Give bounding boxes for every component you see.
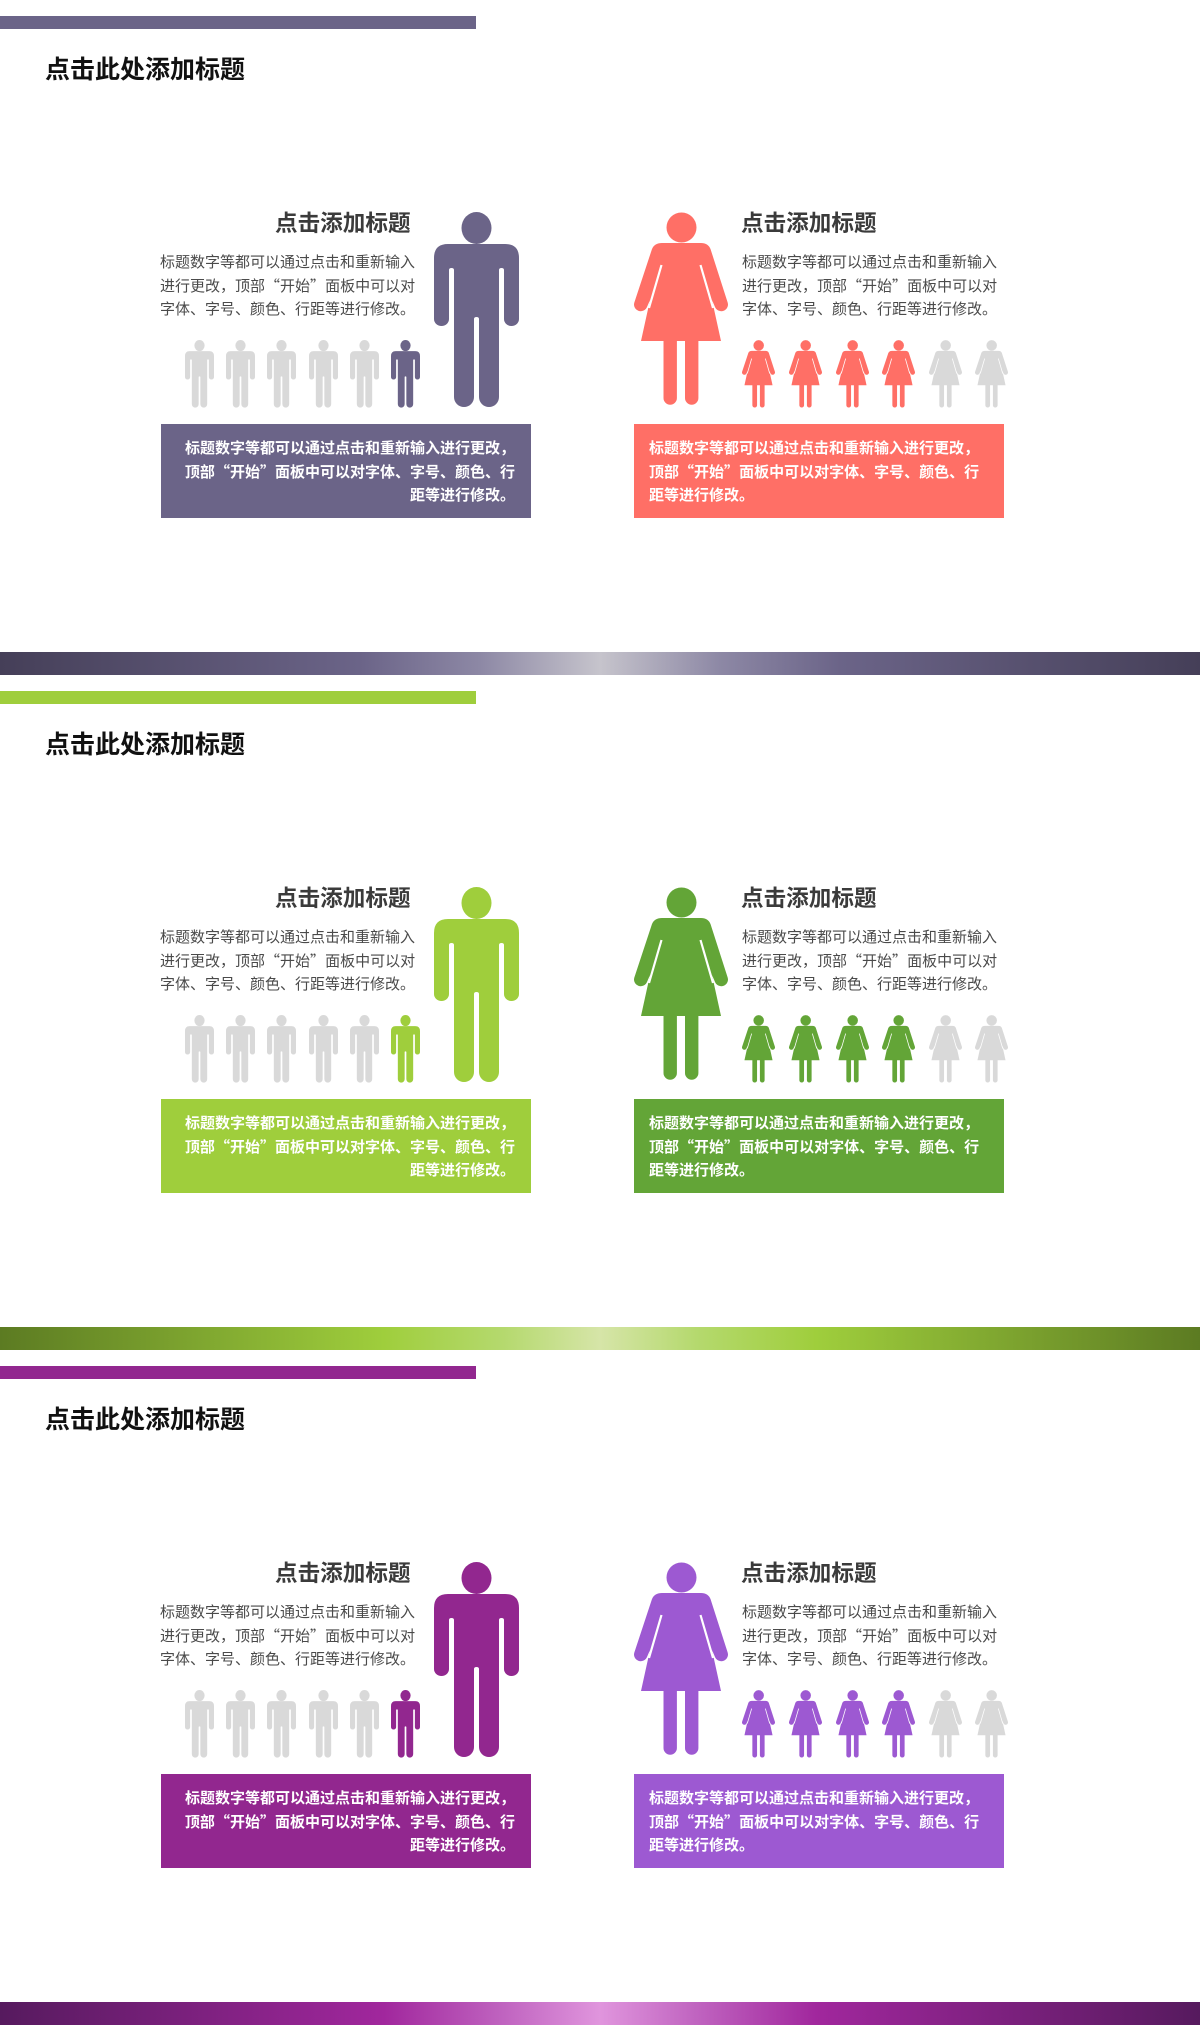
text block: female: 进行更改，顶部“开始”面板中可以对	[742, 1625, 997, 1646]
icon: small man	[226, 1690, 255, 1758]
icon: small woman	[929, 340, 962, 408]
callout text: 顶部“开始”面板中可以对字体、字号、颜色、行	[649, 1811, 979, 1832]
icon: small man	[350, 340, 379, 408]
callout text	[185, 1787, 515, 1858]
icon: small man	[267, 1015, 296, 1082]
icon: small woman	[929, 1690, 962, 1758]
title: 点击此处添加标题	[45, 1406, 245, 1434]
text block: female: 字体、字号、颜色、行距等进行修改。	[742, 1651, 997, 1668]
icon row: small women, 4 of 6 highlighted	[742, 340, 1008, 408]
icon row: small men, 1 of 6 highlighted	[185, 1690, 420, 1758]
icon: small woman highlighted	[742, 1690, 775, 1758]
icon: large man	[434, 887, 519, 1082]
icon: small man	[226, 340, 255, 408]
callout text: 顶部“开始”面板中可以对字体、字号、颜色、行	[649, 461, 979, 482]
callout text: 标题数字等都可以通过点击和重新输入进行更改，	[649, 1790, 979, 1807]
text block: female: 字体、字号、颜色、行距等进行修改。	[742, 301, 997, 318]
text block: male	[160, 254, 415, 318]
callout text: 顶部“开始”面板中可以对字体、字号、颜色、行	[185, 461, 515, 482]
icon: small woman highlighted	[882, 1690, 915, 1758]
gradient divider bar	[0, 652, 1200, 675]
icon: small woman highlighted	[789, 1015, 822, 1082]
icon: large woman	[634, 888, 728, 1080]
callout text	[649, 440, 979, 504]
text block: male	[160, 1601, 415, 1672]
callout text: 标题数字等都可以通过点击和重新输入进行更改，	[185, 440, 515, 457]
callout text	[185, 440, 515, 504]
text block: male: 进行更改，顶部“开始”面板中可以对	[160, 950, 415, 971]
icon row: small women, 4 of 6 highlighted	[742, 1690, 1008, 1758]
text block: male: 标题数字等都可以通过点击和重新输入	[160, 254, 415, 271]
callout text: 距等进行修改。	[649, 1837, 754, 1854]
gradient divider bar	[0, 2002, 1200, 2025]
icon: large woman	[634, 212, 728, 405]
heading: male: 点击添加标题	[275, 886, 411, 911]
text block: male: 字体、字号、颜色、行距等进行修改。	[160, 1651, 415, 1668]
icon: large man	[434, 1562, 519, 1758]
callout text	[649, 1112, 979, 1183]
text block: male: 标题数字等都可以通过点击和重新输入	[160, 1604, 415, 1621]
icon: small man highlighted	[391, 1690, 420, 1758]
icon: small man	[350, 1015, 379, 1082]
text block: female: 进行更改，顶部“开始”面板中可以对	[742, 950, 997, 971]
panel: slide 2	[0, 691, 1200, 1350]
callout text: 距等进行修改。	[410, 487, 515, 504]
icon: small woman highlighted	[882, 340, 915, 408]
icon: small woman highlighted	[836, 340, 869, 408]
text block: female: 标题数字等都可以通过点击和重新输入	[742, 929, 997, 946]
callout text	[185, 1115, 515, 1179]
callout text: 顶部“开始”面板中可以对字体、字号、颜色、行	[185, 1136, 515, 1157]
text block: female: 字体、字号、颜色、行距等进行修改。	[742, 976, 997, 993]
icon: small woman	[975, 1015, 1008, 1083]
icon: large woman	[634, 1562, 728, 1756]
icon: small man	[309, 1015, 338, 1082]
icon: small woman highlighted	[789, 1690, 822, 1758]
callout text: 标题数字等都可以通过点击和重新输入进行更改，	[185, 1115, 515, 1132]
text block: female: 标题数字等都可以通过点击和重新输入	[742, 254, 997, 271]
text block: male: 字体、字号、颜色、行距等进行修改。	[160, 976, 415, 993]
callout: female	[634, 1774, 1004, 1868]
panel: slide 1	[0, 16, 1200, 675]
icon row: small men, 1 of 6 highlighted	[185, 340, 420, 408]
icon: small man	[309, 340, 338, 408]
icon: small man	[267, 340, 296, 408]
text block: female	[742, 1601, 997, 1672]
text block: female	[742, 929, 997, 993]
icon: small man	[185, 1690, 214, 1758]
callout text: 距等进行修改。	[410, 1162, 515, 1179]
callout text: 标题数字等都可以通过点击和重新输入进行更改，	[649, 440, 979, 457]
callout text: 顶部“开始”面板中可以对字体、字号、颜色、行	[185, 1811, 515, 1832]
icon: small man	[267, 1690, 296, 1758]
icon: small man	[185, 340, 214, 408]
icon: small woman highlighted	[742, 340, 775, 408]
icon: small woman highlighted	[882, 1015, 915, 1082]
callout text: 标题数字等都可以通过点击和重新输入进行更改，	[185, 1790, 515, 1807]
callout: male	[161, 1099, 531, 1193]
heading: male: 点击添加标题	[275, 211, 411, 236]
heading: female: 点击添加标题	[741, 886, 877, 911]
icon: small man highlighted	[391, 1015, 420, 1083]
callout text: 标题数字等都可以通过点击和重新输入进行更改，	[649, 1115, 979, 1132]
text block: male: 进行更改，顶部“开始”面板中可以对	[160, 275, 415, 296]
top accent bar	[0, 691, 476, 704]
gradient divider bar	[0, 1327, 1200, 1350]
heading: male: 点击添加标题	[275, 1561, 411, 1586]
text block: male: 字体、字号、颜色、行距等进行修改。	[160, 301, 415, 318]
top accent bar	[0, 1366, 476, 1379]
text block: male	[160, 929, 415, 993]
icon: large man	[434, 212, 519, 407]
callout text	[649, 1787, 979, 1858]
icon: small woman highlighted	[836, 1690, 869, 1758]
callout text: 距等进行修改。	[410, 1837, 515, 1854]
title: 点击此处添加标题	[45, 56, 245, 84]
heading: female: 点击添加标题	[741, 1561, 877, 1586]
panel: slide 3	[0, 1350, 1200, 2025]
callout: female	[634, 1099, 1004, 1193]
icon: small man	[185, 1015, 214, 1082]
icon row: small men, 1 of 6 highlighted	[185, 1015, 420, 1083]
callout: male	[161, 424, 531, 518]
icon: small man highlighted	[391, 340, 420, 408]
text block: female: 进行更改，顶部“开始”面板中可以对	[742, 275, 997, 296]
text block: female: 标题数字等都可以通过点击和重新输入	[742, 1604, 997, 1621]
callout text: 顶部“开始”面板中可以对字体、字号、颜色、行	[649, 1136, 979, 1157]
icon: small woman	[975, 1690, 1008, 1758]
icon: small man	[309, 1690, 338, 1758]
text block: male: 进行更改，顶部“开始”面板中可以对	[160, 1625, 415, 1646]
icon: small man	[350, 1690, 379, 1758]
callout: female	[634, 424, 1004, 518]
text block: female	[742, 254, 997, 318]
callout text: 距等进行修改。	[649, 487, 754, 504]
top accent bar	[0, 16, 476, 29]
heading: female: 点击添加标题	[741, 211, 877, 236]
icon: small woman	[975, 340, 1008, 408]
icon: small woman highlighted	[742, 1015, 775, 1082]
callout text: 距等进行修改。	[649, 1162, 754, 1179]
title: 点击此处添加标题	[45, 731, 245, 759]
icon: small man	[226, 1015, 255, 1082]
text block: male: 标题数字等都可以通过点击和重新输入	[160, 929, 415, 946]
icon: small woman highlighted	[789, 340, 822, 408]
icon row: small women, 4 of 6 highlighted	[742, 1015, 1008, 1082]
icon: small woman	[929, 1015, 962, 1082]
callout: male	[161, 1774, 531, 1868]
icon: small woman highlighted	[836, 1015, 869, 1082]
